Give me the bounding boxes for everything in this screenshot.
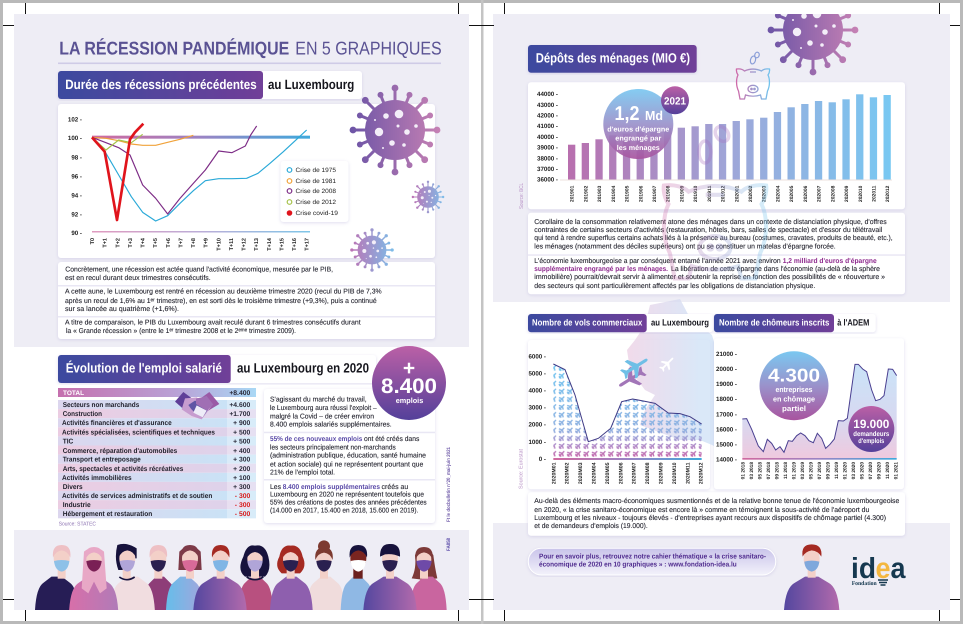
- x axis labels: 202008: [830, 185, 836, 202]
- bars: [568, 94, 891, 180]
- x axis labels: 202001: [734, 185, 740, 202]
- panel: employment text: 8.400 emplois supplémentaires: [283, 483, 380, 491]
- line chart: unemployment: 11 2018: [783, 462, 789, 479]
- line chart: unemployment: 09 2018: [774, 462, 780, 479]
- line chart: unemployment: 17000 -: [716, 411, 737, 418]
- sector rows: + 500: [233, 429, 251, 436]
- x axis labels: 202009: [844, 185, 850, 202]
- x axis labels: T+5: [153, 238, 159, 248]
- panel: employment text: 21% de l'emploi total.: [270, 469, 335, 477]
- total row: [58, 388, 256, 397]
- y axis labels: 102 -: [68, 116, 82, 124]
- line chart: unemployment: 15000 -: [716, 441, 737, 448]
- source: Source: STATEC: [59, 522, 96, 528]
- x axis labels: 202010: [858, 185, 864, 202]
- line chart: commercial flights: 2020M12: [699, 462, 705, 484]
- legend: Crise covid-19: [296, 210, 339, 217]
- line chart: commercial flights: 6000 -: [528, 353, 546, 360]
- x axis labels: 202004: [776, 185, 782, 202]
- heading: évolution de l'emploi: Évolution de l'emploi salarié: [66, 361, 222, 376]
- badge: 2021: 2021: [664, 95, 686, 107]
- x axis labels: 201910: [693, 185, 699, 202]
- x axis labels: T+16: [292, 238, 298, 251]
- x axis labels: 202003: [762, 185, 768, 202]
- line chart: unemployment: 16000 -: [716, 426, 737, 433]
- person 1: [35, 545, 78, 610]
- y axis labels: 36000 -: [537, 177, 558, 184]
- callout: pour en savoir plus: [528, 548, 776, 575]
- callout: pour en savoir plus: Pour en savoir plus, retrouvez notre cahier thématique « la crise sanitaro-: [539, 553, 767, 561]
- x axis labels: 201905: [624, 185, 630, 202]
- bar chart: household deposits: [537, 91, 892, 202]
- line chart: unemployment: 09 2020: [876, 462, 882, 479]
- y axis labels: [537, 91, 558, 184]
- line chart: unemployment: 03 2019: [800, 462, 806, 479]
- panel: employment text: (administration publique, éducation, santé humaine: [270, 452, 426, 460]
- panel: savings text: L'économie luxembourgeoise a par conséquent entamé l'année 2021 avec environ: [534, 257, 781, 265]
- panel: recession text: sur sa lancée au quatrième (+1,6%).: [65, 305, 179, 313]
- panel: recession text: A titre de comparaison, le PIB du Luxembourg avait reculé durant 6 trimestres consécutifs durant: [65, 319, 361, 327]
- line chart: commercial flights: 2020M03: [578, 462, 584, 484]
- source: Eurostat: Source: Eurostat: [518, 449, 524, 489]
- heading: dépôts des ménages: Dépôts des ménages (MIO €): [536, 51, 690, 66]
- line chart: commercial flights: 2020M10: [672, 462, 678, 484]
- panel: employment text: S'agissant du marché du travail,: [270, 396, 367, 404]
- icon: piggy bank: [736, 52, 770, 99]
- heading: vols commerciaux: au Luxembourg: [651, 318, 709, 328]
- title: LA RÉCESSION PANDÉMIQUE: [59, 37, 289, 58]
- legend: Crise de 1975: [296, 167, 337, 174]
- line chart: unemployment: 05 2019: [808, 462, 814, 479]
- y axis labels: 39000 -: [537, 145, 558, 152]
- panel: employment text: et action sociale) qui ne représentent pourtant que: [270, 460, 423, 468]
- heading: chômeurs inscrits: à l'ADEM: [837, 318, 869, 328]
- callout: 1,2 Md: 1,2: [614, 103, 640, 125]
- line chart: commercial flights: 2020M08: [645, 462, 651, 484]
- x axis labels: 202005: [789, 185, 795, 202]
- callout: 1,2 Md: Md: [645, 108, 663, 123]
- panel: conclusion text: [528, 492, 905, 536]
- sector rows: Activités de services administratifs et de soutien: [62, 492, 212, 500]
- person 10: [341, 545, 374, 610]
- person 9: [306, 540, 345, 610]
- callout: 19.000 demandeurs: [848, 406, 894, 452]
- x axis labels: T+3: [128, 238, 134, 248]
- sector rows: TIC: [63, 438, 73, 445]
- person 2: [69, 547, 118, 610]
- line chart: unemployment: 07 2019: [817, 462, 823, 479]
- line chart: unemployment: 01 2020: [842, 462, 848, 479]
- logo: idea Fondation: Fondation: [852, 580, 877, 587]
- map of Luxembourg watermark: [627, 299, 722, 450]
- panel: employment text: créés au: [382, 483, 408, 491]
- sector rows: + 100: [233, 475, 251, 482]
- line chart: unemployment: 03 2020: [851, 462, 857, 479]
- sector rows: + 300: [233, 457, 251, 464]
- source: BCL: Source: BCL: [519, 183, 525, 209]
- panel: employment text: les secteurs principalement non-marchands: [270, 443, 396, 451]
- x axis labels: 201909: [679, 185, 685, 202]
- title: EN 5 GRAPHIQUES: [295, 37, 442, 58]
- y axis labels: 43000 -: [537, 102, 558, 109]
- y axis labels: 38000 -: [537, 155, 558, 162]
- side note: Ft le docbulletin n°20_mai-juin 2021: [446, 447, 452, 522]
- line chart: commercial flights: 2020M05: [605, 462, 611, 484]
- y axis labels: 41000 -: [537, 123, 558, 130]
- sector rows: Industrie: [63, 501, 91, 509]
- panel: savings text: La libération de cette épargne dans l'économie (au-delà de la sphère: [671, 265, 880, 273]
- total row: +8.400: [229, 390, 251, 397]
- line chart: commercial flights: 2020M02: [565, 462, 571, 484]
- side code: FA858: [446, 538, 452, 551]
- panel: employment text: [264, 389, 435, 523]
- logo: idea Fondation: e: [876, 553, 890, 585]
- badge: +8.400 emplois: [372, 346, 446, 420]
- y axis labels: 92 -: [71, 212, 82, 218]
- line chart: commercial flights: 2020M11: [685, 462, 691, 484]
- line chart: unemployment: 09 2019: [826, 462, 832, 479]
- line chart: commercial flights: 2020M06: [618, 462, 624, 484]
- callout: 4.300 entreprises: [760, 351, 828, 420]
- panel: line chart recessions: [58, 104, 435, 258]
- panel: recession text: Concrètement, une récession est actée quand l'activité économique, mesurée par le PIB,: [65, 266, 333, 274]
- sector rows: + 200: [233, 466, 251, 473]
- x axis labels: T+7: [178, 238, 184, 248]
- callout: 19.000 demandeurs: d'emplois: [858, 438, 884, 445]
- sector rows: + 900: [233, 420, 251, 427]
- person 12: [410, 547, 447, 610]
- x axis labels: [570, 185, 891, 202]
- x axis labels: 201911: [707, 185, 713, 202]
- line chart: unemployment: 19000 -: [716, 381, 737, 388]
- legend: Crise de 2012: [296, 199, 337, 206]
- callout: 1,2 Md: les ménages: [617, 144, 660, 152]
- legend: Crise de 2008: [296, 188, 337, 195]
- heading: dépôts des ménages: [528, 45, 697, 73]
- icon: large virus: [350, 85, 440, 175]
- person 8: [270, 546, 313, 610]
- sector rows: - 500: [235, 511, 251, 518]
- callout: 19.000 demandeurs: demandeurs: [853, 431, 889, 438]
- sector rows: + 500: [233, 438, 251, 445]
- line chart: commercial flights: 2000 -: [528, 422, 546, 429]
- badge: +8.400 emplois: 8.400: [381, 375, 437, 398]
- heading: durée des récessions: au Luxembourg: [268, 77, 354, 92]
- y axis labels: 100 -: [68, 135, 82, 142]
- line chart: commercial flights: 4000 -: [528, 388, 546, 394]
- line chart: commercial flights: 2020M07: [632, 462, 638, 484]
- line chart: unemployment: 11 2019: [834, 462, 840, 479]
- y axis labels: 90 -: [71, 230, 82, 237]
- sector rows: Hébergement et restauration: [63, 510, 152, 518]
- person 6: [193, 545, 247, 610]
- heading: vols commerciaux: [528, 314, 713, 332]
- panel: employment table: [58, 388, 256, 528]
- panel: savings text: Corollaire de la consommation relativement atone des ménages dans un contexte de distanciation physique, d'offres: [534, 218, 887, 226]
- sector rows: Activités spécialisées, scientifiques et techniques: [62, 428, 215, 436]
- y axis labels: 98 -: [71, 154, 82, 162]
- line chart: unemployment: [716, 351, 900, 479]
- sector rows: +1.700: [229, 411, 251, 418]
- line chart: unemployment: 05 2018: [758, 462, 764, 479]
- x axis labels: T+10: [216, 238, 222, 251]
- badge: +8.400 emplois: +: [403, 357, 415, 380]
- heading: évolution de l'emploi: [58, 355, 376, 383]
- y axis labels: 37000 -: [537, 166, 558, 173]
- x axis labels: 202011: [872, 185, 878, 202]
- icon: small virus: [412, 181, 444, 213]
- plotted series: [92, 124, 310, 232]
- watermark: ghost piggy bank: [664, 124, 766, 278]
- x axis labels: T+2: [115, 238, 121, 248]
- panel: employment text: ont été créés dans: [364, 435, 420, 443]
- panel: employment text: 8.400 emplois salariés supplémentaires.: [270, 421, 392, 429]
- legend: Crise de 1981: [296, 178, 337, 185]
- callout: 4.300 entreprises: en chômage: [773, 395, 815, 404]
- sector rows: Transport et entreposage: [63, 457, 141, 464]
- y axis labels: 42000 -: [537, 112, 558, 120]
- icon: top virus right page: [768, 14, 858, 76]
- y axis labels: 94 -: [71, 192, 82, 200]
- logo: idea Fondation: id: [851, 553, 876, 585]
- panel: employment text: le Luxembourg aura réussi l'exploit –: [270, 404, 377, 412]
- panel: conclusion text: Luxembourg et les niveaux - toujours élevés - d'entreprises ayant recours aux dispositifs de chômage partiel (4.300): [534, 514, 886, 522]
- panel: employment text: 55% des créations de postes des années précédentes: [270, 498, 427, 506]
- sector rows: Construction: [63, 410, 102, 418]
- badge: +8.400 emplois: emplois: [396, 396, 423, 405]
- panel: savings text: qui tend à rendre superflus certains achats liés à la présence au bureau (costumes, cravates, produits de beauté, etc.),: [534, 234, 893, 242]
- person 5: [166, 545, 203, 610]
- title: [58, 37, 442, 64]
- legend: [280, 161, 348, 222]
- line chart: commercial flights: 1000 -: [528, 439, 546, 446]
- sector rows: - 300: [235, 502, 251, 509]
- person 7: [238, 545, 273, 610]
- panel: recession text: A cette aune, le Luxembourg est rentré en récession au deuxième trimestre 2020 (recul du PIB de 7,3%: [65, 288, 382, 296]
- line chart: recessions: [68, 116, 311, 251]
- x axis labels: 202002: [748, 185, 754, 202]
- heading: vols commerciaux: Nombre de vols commerciaux: [532, 318, 642, 328]
- line chart: unemployment: 21000 -: [716, 351, 737, 358]
- person 11: [363, 544, 417, 610]
- callout: 1,2 Md: [603, 89, 673, 159]
- line chart: commercial flights: 5000 -: [528, 370, 546, 377]
- illustration: row of masked people: [35, 540, 447, 610]
- x axis labels: 201901: [570, 185, 576, 202]
- x axis labels: T+17: [305, 238, 311, 251]
- line chart: unemployment: 18000 -: [716, 396, 737, 403]
- y axis labels: [68, 116, 82, 237]
- panel: employment text: (14.000 en 2017, 15.400 en 2018, 15.600 en 2019).: [270, 507, 418, 515]
- heading: chômeurs inscrits: [714, 314, 876, 332]
- heading: évolution de l'emploi: au Luxembourg en 2020: [237, 361, 369, 376]
- sector rows: Arts, spectacles et activités récréatives: [63, 465, 183, 473]
- line chart: unemployment: 05 2020: [860, 462, 866, 479]
- x axis labels: T+15: [279, 238, 285, 251]
- icon: planes: [614, 351, 677, 395]
- x axis labels: T+13: [254, 238, 260, 251]
- line chart: unemployment: 01 2019: [792, 462, 798, 479]
- total row: TOTAL: [63, 390, 84, 397]
- logo: idea Fondation: [851, 553, 906, 587]
- panel: employment text: 55% de ces nouveaux emplois: [270, 435, 362, 443]
- x axis labels: 201907: [652, 185, 658, 202]
- y axis labels: 96 -: [71, 174, 82, 180]
- panel: bar chart: [528, 82, 905, 209]
- line chart: commercial flights: 3000 -: [528, 405, 546, 412]
- line chart: unemployment: 20000 -: [716, 366, 737, 373]
- panel: employment text: Les: [270, 484, 281, 491]
- heading: durée des récessions: Durée des récessions précédentes: [65, 77, 257, 92]
- x axis labels: T+8: [191, 238, 197, 248]
- x axis labels: 201906: [638, 185, 644, 202]
- heading: durée des récessions: [58, 71, 362, 99]
- line chart: unemployment: 07 2018: [766, 462, 772, 479]
- callout: 1,2 Md: engrangé par: [615, 134, 662, 142]
- panel: employment text: malgré la Covid – de créer environ: [270, 412, 374, 420]
- sector rows: Secteurs non marchands: [63, 401, 139, 409]
- x axis labels: 201912: [721, 185, 727, 202]
- icon: handshake: [175, 392, 219, 419]
- x axis labels: T+11: [229, 238, 235, 250]
- panel: savings text: [528, 213, 905, 294]
- x axis labels: 201904: [611, 185, 617, 202]
- line chart: unemployment: 03 2018: [749, 462, 755, 479]
- sector rows: Commerce, réparation d'automobiles: [63, 447, 177, 455]
- panel: conclusion text: en 2020, « la crise sanitaro-économique est encore là » comme en témoignent la sous-activité de l'aéroport du: [534, 506, 869, 514]
- x axis labels: 202012: [885, 185, 891, 202]
- line chart: unemployment: 01 2018: [740, 462, 746, 479]
- x axis labels: [90, 237, 311, 251]
- x axis labels: 201903: [597, 185, 603, 202]
- panel: unemployment chart: [714, 338, 904, 489]
- y axis labels: 40000 -: [537, 134, 558, 141]
- line chart: unemployment: 11 2020: [885, 462, 891, 479]
- panel: savings text: supplémentaire engrangé par les ménages.: [534, 265, 668, 273]
- sector rows: Activités financières et d'assurance: [62, 419, 172, 427]
- line chart: commercial flights: 0 -: [539, 456, 546, 463]
- x axis labels: T+14: [267, 237, 273, 251]
- x axis labels: 201902: [583, 185, 589, 202]
- line chart: unemployment: 01 2021: [894, 462, 900, 479]
- logo: idea Fondation: a: [890, 553, 906, 585]
- line chart: unemployment: 07 2020: [868, 462, 874, 479]
- panel: savings text: immobilière) pourrait/devrait servir à alimenter et soutenir la reprise en fonction des possibilités de « réouverture »: [534, 273, 885, 281]
- x axis labels: T0: [90, 238, 96, 244]
- icon: medium virus: [350, 228, 394, 272]
- sector rows: + 300: [233, 484, 251, 491]
- person 4: [143, 545, 177, 610]
- x axis labels: T+1: [103, 238, 109, 248]
- line chart: commercial flights: 2020M04: [592, 462, 598, 484]
- badge: 2021: [661, 86, 689, 114]
- panel: conclusion text: Au-delà des éléments macro-économiques susmentionnés et de la relative bonne tenue de l'économie luxembourgeoise: [534, 497, 899, 505]
- panel: savings text: contraintes de certains secteurs d'activités (restauration, hôtels, bars, salles de spectacle) et d'essor du télétravail: [534, 226, 883, 234]
- line chart: commercial flights: 2020M09: [658, 462, 664, 484]
- line chart: commercial flights: 2020M01: [551, 462, 557, 484]
- callout: 4.300 entreprises: entreprises: [776, 385, 812, 394]
- heading: chômeurs inscrits: Nombre de chômeurs inscrits: [719, 318, 829, 328]
- callout: pour en savoir plus: économique de 2020 en 10 graphiques » : www.fondation-idea.lu: [539, 561, 737, 569]
- sector rows: Divers: [63, 483, 83, 491]
- x axis labels: T+9: [204, 238, 210, 248]
- panel: flights chart: [528, 340, 710, 489]
- sector rows: - 300: [235, 493, 251, 500]
- callout: 19.000 demandeurs: 19.000: [853, 417, 890, 431]
- person 3: [110, 544, 155, 610]
- sector rows: +4.600: [229, 402, 251, 409]
- sector rows: Activités immobilières: [62, 474, 132, 482]
- illustration: masked man: [784, 544, 839, 610]
- x axis labels: 202006: [803, 185, 809, 202]
- panel: savings text: 1,2 milliard d'euros d'épargne: [783, 257, 877, 265]
- callout: 4.300 entreprises: partiel: [782, 404, 806, 413]
- x axis labels: 202007: [817, 185, 823, 202]
- y axis labels: 44000 -: [537, 91, 558, 98]
- panel: recession text: est en recul durant deux trimestres consécutifs.: [65, 274, 211, 282]
- sector rows: [58, 400, 256, 518]
- sector rows: + 400: [233, 448, 251, 455]
- panel: employment text: Luxembourg en 2020 ne représentent toutefois que: [270, 490, 424, 498]
- callout: 1,2 Md: d'euros d'épargne: [607, 126, 669, 134]
- panel: savings text: les ménages (notamment des déciles supérieurs) ont pu se constituer un matelas d'épargne forcée.: [534, 243, 836, 251]
- x axis labels: T+6: [166, 238, 172, 248]
- line chart: unemployment: 14000 -: [716, 456, 737, 463]
- panel: conclusion text: et de demandeurs d'emplois (19.000).: [534, 522, 648, 530]
- panel: recession text: [58, 262, 435, 339]
- plane pattern area: [553, 364, 702, 459]
- x axis labels: 201908: [666, 185, 672, 202]
- panel: savings text: des secteurs qui sont particulièrement affectés par les obligations de distanciation physique.: [534, 282, 815, 290]
- panel: recession text: après un recul de 1,6% au 1ᵉʳ trimestre), en est sorti dès le troisième trimestre (+9,3%), puis a continué: [65, 297, 377, 305]
- panel: recession text: la « Grande récession » (entre le 1ᵉʳ trimestre 2008 et le 2ᵉᵐᵉ trimestre 2009).: [66, 327, 296, 335]
- x axis labels: T+12: [242, 238, 248, 251]
- line chart: commercial flights: [528, 351, 705, 484]
- x axis labels: T+4: [140, 237, 146, 248]
- callout: 4.300 entreprises: 4.300: [768, 365, 820, 386]
